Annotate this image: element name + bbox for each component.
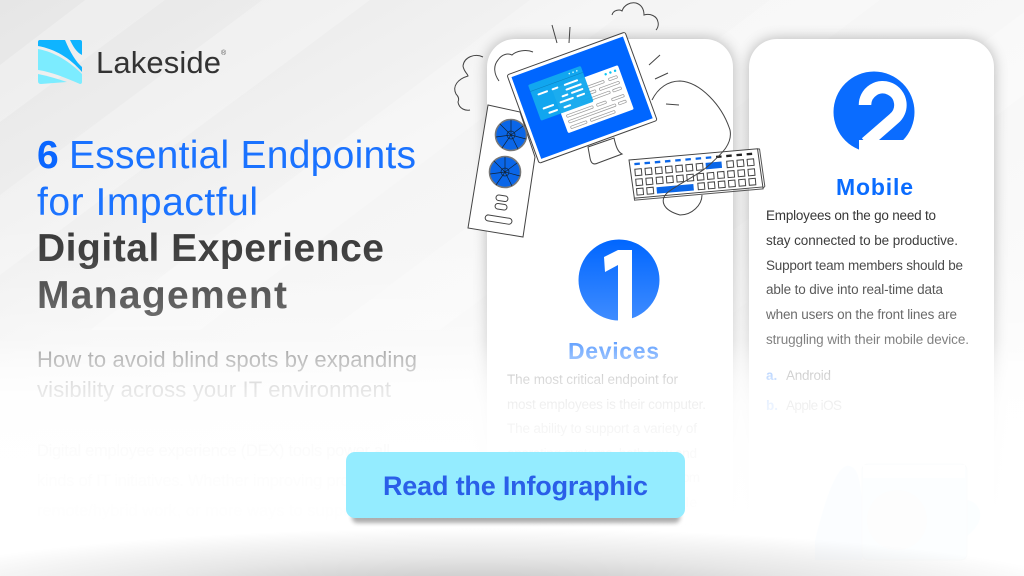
icon: Lakeside mark bbox=[38, 40, 82, 84]
text: mobile description: Support team members should be bbox=[766, 258, 963, 273]
title: Management bbox=[37, 274, 287, 317]
text: mobile description bbox=[765, 208, 969, 347]
text: devices description: The ability to support a variety of bbox=[507, 421, 697, 436]
icon: cloud left bbox=[455, 55, 483, 110]
intro paragraph: Digital employee experience (DEX) tools power all bbox=[37, 442, 390, 460]
text: devices description: legacy, is essential for IT teams, from bbox=[507, 470, 700, 485]
registered mark: ® bbox=[221, 49, 227, 57]
screen: cyan window bbox=[528, 66, 594, 121]
text: devices description bbox=[507, 372, 706, 534]
list: mobile platforms: a. bbox=[766, 368, 777, 383]
floor shadow bbox=[0, 528, 1024, 576]
text: mobile description: able to dive into real-time data bbox=[766, 282, 943, 297]
title: 6 bbox=[37, 134, 59, 177]
intro paragraph: kinds of IT initiatives. Whether improving productivity bbox=[37, 472, 408, 490]
list: mobile platforms: Apple iOS bbox=[786, 398, 842, 413]
list: mobile platforms: b. bbox=[766, 398, 778, 413]
title bbox=[37, 134, 416, 317]
button: Read the Infographic bbox=[346, 452, 685, 523]
subtitle: How to avoid blind spots by expanding bbox=[37, 347, 417, 372]
text: mobile description: when users on the front lines are bbox=[765, 307, 957, 322]
panel: left intro text bbox=[37, 134, 417, 520]
panel: mobile card bbox=[749, 39, 994, 576]
icon: faint phone in hand illustration bbox=[815, 464, 980, 560]
icon: tower case bbox=[468, 105, 535, 237]
icon: monitor stand bbox=[588, 138, 622, 164]
title: Essential Endpoints bbox=[69, 134, 416, 177]
text: devices description: operating systems, both new and bbox=[507, 446, 697, 461]
text: devices description: The most critical endpoint for bbox=[507, 372, 678, 387]
list: mobile platforms: Android bbox=[786, 368, 831, 383]
icon: mouse cable bbox=[652, 81, 730, 215]
text: mobile description: stay connected to be productive. bbox=[766, 233, 958, 248]
screen: white window bbox=[552, 65, 634, 133]
panel: devices card bbox=[487, 39, 733, 576]
logo bbox=[38, 40, 227, 84]
subtitle: visibility across your IT environment bbox=[37, 377, 391, 402]
title: for Impactful bbox=[37, 181, 258, 224]
text: devices description: organization across the enterprise. bbox=[507, 519, 697, 534]
text: mobile description: Employees on the go need to bbox=[766, 208, 936, 223]
text: devices description: the service desk to the whole bbox=[507, 495, 697, 510]
wordmark: Lakeside bbox=[96, 45, 221, 80]
subtitle bbox=[37, 347, 417, 402]
motion rays bbox=[552, 25, 679, 105]
intro paragraph bbox=[37, 442, 408, 520]
icon: number 1 badge bbox=[578, 240, 660, 322]
icon: keyboard bbox=[629, 148, 765, 200]
title: Digital Experience bbox=[37, 227, 384, 270]
icon: cloud middle bbox=[495, 51, 533, 81]
icon: cloud top bbox=[612, 3, 658, 30]
text: mobile description: struggling with their mobile device. bbox=[766, 332, 969, 347]
heading: Mobile: Mobile bbox=[836, 174, 913, 200]
icon: number 2 badge bbox=[834, 72, 919, 156]
list: mobile platforms bbox=[766, 368, 842, 413]
button: Read the Infographic: Read the Infographic bbox=[383, 471, 648, 501]
intro paragraph: remote/hybrid work, or more ways to support users bbox=[37, 502, 407, 520]
icon: monitor bbox=[507, 32, 657, 163]
text: devices description: most employees is their computer. bbox=[507, 397, 706, 412]
illustration: desktop computer bbox=[455, 3, 765, 237]
heading: Devices: Devices bbox=[568, 338, 659, 364]
